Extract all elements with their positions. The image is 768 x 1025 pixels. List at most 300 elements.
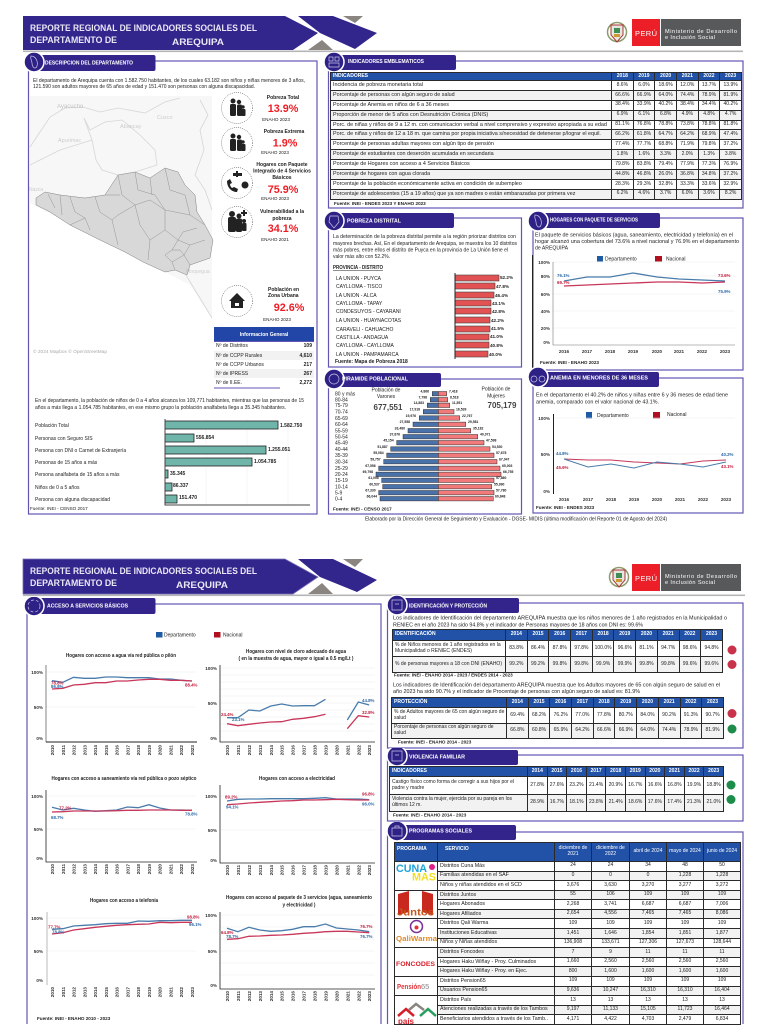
line chart: 2020 — [652, 349, 663, 354]
map place names — [29, 104, 210, 275]
district bar chart: LA UNION - PUYCA — [336, 276, 382, 282]
line chart: 20% — [541, 326, 550, 331]
chart: agua via red publica: 2021 — [168, 745, 174, 755]
map: © 2024 Mapbox © OpenStreetMap — [33, 348, 107, 355]
proteccion table: 2019 — [620, 699, 631, 705]
violencia table: 19.9% — [687, 782, 701, 788]
page 1 header banner — [23, 16, 743, 52]
age labels: 55-59 — [335, 428, 348, 434]
chart: telefonia — [31, 898, 202, 997]
programas table: Distritos País — [440, 997, 471, 1003]
male and female totals: Población de — [482, 386, 511, 392]
proteccion table: 91.3% — [684, 712, 698, 718]
stat: pobreza extrema: 1.9% — [273, 138, 298, 150]
chart: telefonia: 2018 — [136, 987, 141, 997]
stat: pobreza extrema: Pobreza Extrema — [264, 129, 305, 135]
stat: hogares con paquete: 75.9% — [268, 184, 299, 196]
chart: nivel de cloro: 2011 — [236, 745, 241, 755]
indicators table: 2020 — [660, 73, 671, 79]
programas table: 16,310 — [640, 987, 656, 993]
stat: pobreza extrema — [222, 128, 305, 158]
female values — [449, 390, 513, 498]
district bar chart: CARAVELI - CAHUACHO — [336, 327, 394, 333]
chart: paquete de 3 servicios: y electricidad ) — [282, 902, 316, 908]
informacion general table: 2,272 — [299, 380, 312, 386]
population bar chart: 1.054.785 — [254, 459, 276, 465]
chart: paquete de 3 servicios: 2014 — [269, 991, 274, 1001]
programas table: 4,171 — [567, 1016, 579, 1022]
indicators table: 2022 — [703, 73, 715, 79]
stat: pobreza total — [222, 92, 300, 124]
programas table: 24 — [570, 862, 576, 868]
indicators table: 46.8% — [637, 171, 651, 177]
panel: violencia familiar — [386, 748, 744, 822]
proteccion table: 2018 — [599, 699, 610, 705]
chart: telefonia: 2014 — [93, 987, 98, 997]
chart: telefonia: 2019 — [147, 987, 152, 997]
logo: juntos: Juntos — [397, 908, 434, 918]
program logos — [396, 863, 438, 1024]
proteccion table: 66.8% — [510, 727, 524, 733]
identificacion table: 96.6% — [618, 645, 632, 651]
chart: telefonia: 2010 — [50, 987, 55, 997]
programas table: 34 — [645, 862, 651, 868]
programas table: 133,671 — [601, 939, 620, 945]
chart: agua via red publica: 2012 — [72, 745, 76, 755]
identificacion table: 99.6% — [683, 661, 697, 667]
proteccion table: 64.2% — [575, 727, 590, 733]
identificacion table: 87.8% — [553, 645, 567, 651]
male values: 17,918 — [410, 408, 420, 412]
indicators table: 66.6% — [615, 92, 629, 98]
proteccion table: 77.0% — [575, 712, 590, 718]
violencia table: 2019 — [630, 768, 641, 774]
identificacion table: 2021 — [663, 631, 674, 637]
violencia table: 20.9% — [609, 782, 623, 788]
chart: paquete de 3 servicios: 50% — [208, 949, 217, 954]
age labels: 45-49 — [335, 440, 348, 446]
programas table: Beneficiarios atendidos a través de los Tamb.. — [440, 1016, 548, 1022]
indicators table: 33.3% — [680, 181, 694, 187]
chart: agua via red publica: 2017 — [125, 745, 130, 755]
programas table: 1,851 — [679, 930, 691, 936]
identificacion table: 2020 — [641, 631, 652, 637]
programas table: 2,560 — [604, 958, 617, 964]
programas table: 109 — [644, 920, 652, 926]
line chart: 2021 — [675, 497, 686, 502]
intro text: El paquete de servicios básicos (agua, saneamiento, electricidad y telefonía) en el — [535, 232, 733, 238]
chart: nivel de cloro: 2022 — [356, 745, 361, 755]
identificacion table: 2019 — [619, 631, 630, 637]
line chart: 2017 — [582, 349, 593, 354]
indicators table: 73.8% — [680, 121, 694, 127]
chart: agua via red publica: 2013 — [82, 745, 87, 755]
age labels: 10-14 — [335, 484, 348, 490]
chart: nivel de cloro: 100% — [205, 666, 217, 671]
proteccion text: Los indicadores de Identificación del departamento AREQUIPA muestra que los Adultos mayores de 65 con algún seguro de salud en el — [393, 682, 720, 688]
indicators table: 2018 — [617, 73, 628, 79]
district bar chart: 40.0% — [489, 352, 502, 357]
legend: Departamento — [605, 256, 637, 262]
programas table: diciembre de 2022 — [596, 845, 625, 857]
indicators table: 44.8% — [615, 171, 629, 177]
violencia table: 21.4% — [589, 782, 603, 788]
chart: electricidad: 2010 — [225, 865, 230, 875]
report title: REPORTE REGIONAL DE INDICADORES SOCIALES DEL — [30, 23, 257, 33]
logo: Peru ministry: Ministerio de Desarrollo — [665, 574, 737, 580]
map — [29, 96, 213, 355]
programas table: 24 — [608, 862, 613, 868]
violencia table: 2018 — [610, 768, 621, 774]
section heading — [24, 52, 156, 72]
logo: qali warma: QaliWarma — [396, 936, 437, 943]
population text — [35, 398, 304, 411]
programas table: 109 — [606, 977, 615, 983]
section heading — [528, 211, 660, 231]
logo: Peru ministry: e Inclusión Social — [665, 35, 715, 41]
programas table: 109 — [681, 920, 689, 926]
violencia table: 18.6% — [628, 799, 642, 805]
section heading: VIOLENCIA FAMILIAR — [409, 754, 465, 760]
identificacion table: 99.6% — [704, 661, 719, 667]
page 2 header banner — [22, 558, 745, 596]
indicators table: 1.3% — [703, 151, 715, 157]
programas table: 11 — [645, 949, 651, 955]
section heading: PROGRAMAS SOCIALES — [409, 828, 473, 834]
chart: nivel de cloro: 2013 — [258, 745, 263, 755]
identificacion table: % de Niños menores de 1 año registrados en la Municipalidad o RENIEC (ENDES) — [395, 642, 501, 654]
identificacion table: IDENTIFICACIÓN — [395, 631, 436, 637]
chart: paquete de 3 servicios: 2022 — [356, 991, 361, 1001]
programas table: 109 — [718, 977, 726, 983]
programas table: 800 — [569, 968, 577, 974]
programas table: 136,908 — [564, 939, 582, 945]
chart: electricidad: 2019 — [324, 865, 328, 875]
indicators table: 32.8% — [659, 181, 673, 187]
violencia table: 17.4% — [667, 799, 682, 805]
legend — [156, 632, 242, 638]
programas table: 15,105 — [640, 1006, 656, 1012]
chart: electricidad: 2023 — [367, 865, 372, 875]
identificacion table: 99.9% — [596, 661, 610, 667]
identificacion table: 94.7% — [661, 645, 675, 651]
section heading — [528, 367, 659, 387]
indicators table: 76.9% — [724, 161, 738, 167]
age labels: 75-79 — [335, 403, 348, 409]
population bar chart: 1.582.750 — [280, 423, 302, 429]
programas table: 9 — [609, 949, 612, 955]
programas table: Niños y Niñas atendidos — [440, 939, 497, 945]
age labels: 50-54 — [335, 434, 348, 440]
district bar chart: 52.2% — [500, 275, 513, 280]
informacion general table: Nº de CCPP Rurales — [216, 353, 263, 359]
line chart: 2018 — [606, 497, 617, 502]
identificacion text — [393, 616, 727, 628]
programas table: 1,600 — [604, 968, 617, 974]
programas table: 9,636 — [567, 987, 579, 993]
violencia table: 27.6% — [550, 782, 564, 788]
male values: 7,798 — [418, 396, 427, 400]
age labels: 35-39 — [335, 453, 348, 459]
logo: pais — [398, 1004, 436, 1025]
informacion general table: 109 — [304, 343, 312, 349]
panel: piramide poblacional — [324, 370, 522, 515]
intro text: La determinación de la pobreza distrital permite a la región priorizar distritos con — [333, 234, 516, 240]
chart: nivel de cloro: 2014 — [269, 745, 274, 755]
stat: vulnerabilidad: pobreza — [272, 216, 292, 222]
chart: telefonia: 77.7% — [48, 924, 61, 930]
male values: 69,798 — [363, 470, 373, 474]
panel: acceso a servicios basicos — [24, 597, 382, 1024]
chart: electricidad: 2014 — [269, 865, 274, 875]
chart: telefonia: 2022 — [179, 987, 184, 997]
identificacion table: 2014 — [511, 631, 522, 637]
indicators table: 79.8% — [702, 141, 716, 147]
age labels: 80 y más — [335, 392, 356, 398]
panel: indicadores emblematicos — [324, 52, 744, 209]
section heading: PIRAMIDE POBLACIONAL — [342, 376, 408, 382]
stat: hogares con paquete: Integrado de 4 Servicios — [253, 168, 311, 174]
programas table: 16,310 — [677, 987, 693, 993]
chart: electricidad: 89.2% — [225, 794, 238, 800]
line chart: 60% — [541, 292, 550, 297]
indicators table: 66.2% — [615, 131, 629, 137]
report title: AREQUIPA — [172, 37, 224, 48]
chart: saneamiento — [31, 776, 198, 874]
population bar chart — [35, 419, 310, 505]
district bar chart: 42.2% — [491, 318, 504, 323]
violencia table: 16.7% — [550, 799, 564, 805]
chart: electricidad: 2016 — [291, 865, 296, 875]
population text: años a más llega a 1.054.785 habitantes, en ese mismo grupo la población analfabeta llega a 35.345 habitantes. — [35, 405, 286, 411]
male values: 19,976 — [406, 414, 416, 418]
chart: paquete de 3 servicios: 2015 — [280, 991, 285, 1001]
identificacion text: RENIEC en el año 2023 ha sido 94.8% y el indicador de Personas mayores de 18 años con DNI es: 99.6% — [393, 622, 644, 628]
proteccion table: 76.2% — [554, 712, 568, 718]
indicators table: 1.8% — [617, 151, 628, 157]
proteccion text: año 2023 ha sido 90.7% y el indicador de Procentaje de personas con algún seguro de salud es: 81.9% — [393, 689, 641, 695]
proteccion table: 2014 — [512, 699, 523, 705]
chart: electricidad: 96.8% — [362, 792, 375, 796]
indicators table: 81.1% — [615, 121, 629, 127]
line chart — [538, 412, 735, 502]
age labels: 5-9 — [335, 490, 342, 496]
report title: AREQUIPA — [176, 580, 228, 591]
chart: telefonia: 2015 — [104, 987, 109, 997]
age labels: 25-29 — [335, 466, 348, 472]
indicators table: Proporción de menor de 5 años con Desnutrición Crónica (DNIS) — [333, 112, 488, 118]
chart: nivel de cloro: 2020 — [334, 745, 339, 755]
stat: vulnerabilidad: Vulnerabilidad a la — [260, 209, 304, 215]
chart: electricidad: 94.1% — [226, 804, 239, 810]
chart: paquete de 3 servicios: 2023 — [367, 991, 372, 1001]
chart: nivel de cloro — [205, 649, 375, 755]
chart: saneamiento: 2015 — [104, 864, 109, 874]
indicators table: 6.9% — [617, 111, 628, 117]
chart: paquete de 3 servicios: 100% — [205, 913, 217, 918]
programas table: Familias atendidas en el SAF — [440, 872, 509, 878]
informacion general table: Nº de Distritos — [216, 343, 248, 349]
male values: 33,480 — [395, 426, 405, 430]
identificacion table: 99.8% — [639, 661, 654, 667]
line chart: 0% — [543, 340, 550, 345]
female values: 54,530 — [492, 445, 502, 449]
programas table: 11 — [719, 949, 725, 955]
chart: paquete de 3 servicios: 2011 — [236, 991, 241, 1001]
logo: Peru ministry — [632, 564, 741, 591]
identificacion table: 99.2% — [531, 661, 545, 667]
indicators table: 37.2% — [724, 171, 738, 177]
indicators table: 66.9% — [637, 92, 651, 98]
district bar chart: CAYLLOMA - TAPAY — [336, 301, 383, 307]
chart: nivel de cloro: 2017 — [302, 745, 307, 755]
programas table: Atenciones realizadas a través de los Tambos — [440, 1006, 548, 1012]
indicators table: 78.8% — [659, 121, 673, 127]
indicators table: 81.8% — [724, 121, 738, 127]
chart: nivel de cloro: 2010 — [225, 745, 230, 755]
indicators table: 38.4% — [615, 101, 629, 107]
proteccion table: 64.0% — [640, 727, 655, 733]
proteccion table: 60.8% — [532, 727, 546, 733]
programas table: 4,422 — [604, 1016, 617, 1022]
male values — [363, 390, 429, 498]
programas table: PROGRAMA — [397, 846, 427, 852]
chart: saneamiento: 2021 — [168, 864, 174, 874]
programas table: 3,741 — [604, 901, 617, 907]
male and female totals: 705,179 — [488, 401, 517, 410]
identificacion table: 99.8% — [661, 661, 675, 667]
indicators table: 33.6% — [702, 181, 716, 187]
chart: agua via red publica: 2016 — [115, 745, 120, 755]
section heading: IDENTIFICACIÓN Y PROTECCIÓN — [409, 602, 487, 610]
line chart: 43.1% — [721, 464, 734, 469]
logo: pension 65: Pensión — [397, 984, 421, 991]
indicators table: 77.9% — [680, 161, 694, 167]
population bar chart: Persona con alguna discapacidad — [35, 497, 110, 503]
programas table: 9,197 — [567, 1006, 579, 1012]
indicators table: 2023 — [725, 73, 736, 79]
report title: DEPARTAMENTO DE — [30, 35, 117, 45]
line chart: 100% — [538, 416, 550, 421]
chart: paquete de 3 servicios: 76.7% — [360, 934, 373, 939]
programas table: Distritos Pension65 — [440, 978, 486, 984]
programas table: 0 — [609, 872, 612, 878]
source: Fuente: INEI - ENDES 2023 — [536, 505, 595, 510]
indicators table: 2019 — [638, 73, 650, 79]
logo: qali warma — [396, 920, 437, 943]
programas table: 13 — [645, 997, 651, 1003]
chart: paquete de 3 servicios: 2012 — [247, 991, 252, 1001]
source: Fuente: INEI - ENDES 2023 Y ENAHO 2023 — [334, 201, 426, 206]
stat: hogares con paquete: Básicos — [272, 175, 292, 181]
indicators table: INDICADORES — [333, 73, 368, 79]
programas table: 13 — [719, 997, 725, 1003]
chart: electricidad: 2018 — [312, 865, 318, 875]
line chart: 76.1% — [557, 273, 570, 278]
indicators table: 6.0% — [638, 82, 650, 88]
violencia table: 21.3% — [687, 799, 701, 805]
panel: pobreza distrital — [324, 212, 522, 368]
identificacion table: 99.2% — [509, 661, 523, 667]
indicators table: 1.6% — [638, 151, 650, 157]
chart: electricidad: 0% — [210, 858, 217, 863]
legend: Departamento — [164, 632, 196, 638]
violencia table: 2017 — [591, 768, 602, 774]
chart: nivel de cloro: 44.8% — [362, 698, 375, 703]
violencia table: 21.0% — [707, 799, 721, 805]
line chart: 2022 — [698, 497, 709, 502]
line chart: 80% — [541, 274, 550, 279]
district bar chart: 46.4% — [495, 293, 508, 298]
male values: 14,883 — [414, 401, 424, 405]
section heading — [387, 821, 516, 841]
line chart: 100% — [538, 260, 550, 265]
stat: poblacion urbana: 92.6% — [274, 302, 305, 314]
programas table: 3,270 — [642, 882, 654, 888]
chart: agua via red publica: 2015 — [104, 745, 109, 755]
programas table: 7,006 — [716, 901, 728, 907]
male and female totals: Mujeres — [487, 394, 505, 400]
chart: electricidad: 2021 — [345, 865, 350, 875]
chart: saneamiento: 78.8% — [185, 812, 198, 816]
indicators table: Porc. de niñas y niños de 9 a 12 m. con comunicacion verbal a nivel comprensivo y expresivo apropiada a su edad — [333, 122, 607, 128]
line chart: 45.6% — [556, 465, 569, 470]
chart: paquete de 3 servicios: 2021 — [345, 991, 350, 1001]
programas table: 11,723 — [678, 1006, 692, 1012]
programas table: Hogares Haku Wiñay - Proy. Culminados — [440, 959, 536, 965]
intro text — [536, 392, 728, 406]
male and female totals: Varones — [377, 394, 396, 400]
chart: electricidad — [205, 776, 375, 875]
programas table: 7 — [572, 949, 574, 955]
indicators table: 4.7% — [725, 111, 736, 117]
proteccion table: 2015 — [533, 699, 545, 705]
indicators table: 6.2% — [617, 190, 628, 196]
programas table: 13 — [682, 997, 688, 1003]
chart: telefonia: 100% — [31, 916, 43, 921]
programas table: 109 — [644, 891, 652, 897]
indicators table: 77.4% — [615, 141, 629, 147]
chart: agua via red publica: 2018 — [136, 745, 141, 755]
programas table: 7,465 — [679, 910, 691, 916]
intro text: valor más alto con 52.2%. — [333, 254, 390, 260]
chart: telefonia: 0% — [36, 978, 43, 983]
stat: poblacion urbana — [222, 286, 305, 322]
chart: agua via red publica: 2023 — [190, 745, 195, 755]
section heading — [387, 595, 519, 615]
programas table: Distritos Cuna Más — [440, 863, 485, 869]
stat: pobreza total: 13.9% — [268, 103, 299, 115]
section heading: ANEMIA EN MENORES DE 36 MESES — [550, 376, 649, 382]
line chart: 2019 — [629, 497, 640, 502]
violencia table: 16.7% — [628, 782, 642, 788]
female values: 65,003 — [502, 464, 512, 468]
indicators table: 32.9% — [724, 181, 738, 187]
informacion general table: Nº de IPRESS — [216, 371, 249, 377]
indicators table: Porcentaje de Anemia en niños de 6 a 36 meses — [333, 102, 449, 108]
programas table: Distritos Foncodes — [440, 949, 484, 955]
identificacion table: 100.0% — [595, 645, 612, 651]
informacion general table: 217 — [304, 362, 312, 368]
chart: electricidad: 2020 — [334, 865, 339, 875]
female bars — [438, 392, 501, 501]
indicators table: 3.6% — [703, 190, 715, 196]
section heading — [324, 369, 441, 389]
legend — [597, 256, 685, 262]
chart: saneamiento: 50% — [34, 827, 43, 832]
identificacion table: 2022 — [684, 631, 695, 637]
programas table: 109 — [681, 977, 689, 983]
